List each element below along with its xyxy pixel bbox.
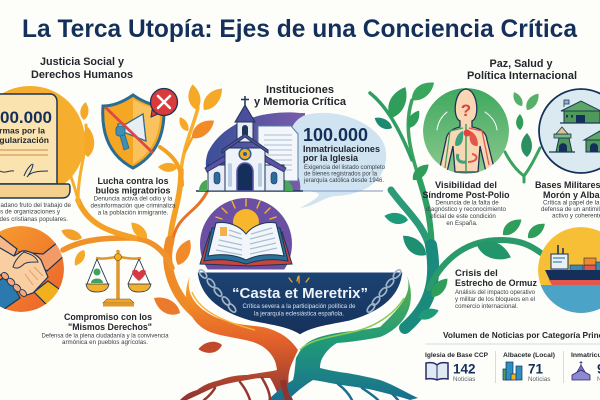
text block: Bases Militares <box>535 180 600 220</box>
stat: Albacete (Local) <box>503 352 555 383</box>
text block: 100.000 inmatriculaciones: jerarquía católica desde 1946. <box>303 177 384 184</box>
text block: Compromiso con los Mismos Derechos: armónica en pueblos agrícolas. <box>62 339 148 346</box>
tree: left orange branches <box>59 83 226 319</box>
icon: left chain <box>198 269 237 313</box>
text block: Visibilidad del Sindrome Post-Polio: en España. <box>446 220 478 227</box>
text block: Visibilidad del Sindrome Post-Polio: oficial de este condición <box>430 213 496 220</box>
tree trunk and roots <box>180 276 418 400</box>
icon: military bases circle <box>539 89 600 173</box>
text block: 100.000 inmatriculaciones: por la Iglesia <box>303 153 359 163</box>
heading: Justicia Social: Derechos Humanos <box>31 69 133 81</box>
icon: open book with sun <box>200 198 292 290</box>
icon: cargo ship circle <box>538 227 600 315</box>
icon: city buildings <box>503 362 522 380</box>
text block: Visibilidad del Sindrome Post-Polio <box>422 180 510 227</box>
text block: Visibilidad del Sindrome Post-Polio: Visibilidad del <box>435 180 497 191</box>
icon: paper list <box>258 126 298 181</box>
text block: Crisis del Estrecho de Ormuz <box>455 268 537 310</box>
icon: handshake circle <box>0 226 66 315</box>
stat: Albacete (Local): 71 <box>528 362 544 376</box>
stat: Albacete (Local): Noticias <box>528 376 550 383</box>
text block: Lucha contra los bulos: a la población inmigrante. <box>98 210 169 216</box>
text block: 100.000 inmatriculaciones: Exigencia del listado completo <box>304 164 386 171</box>
heading: Instituciones y Memoria Crítica <box>254 84 347 108</box>
text block: Visibilidad del Sindrome Post-Polio: Síndrome Post-Polio <box>422 190 510 201</box>
heading: Justicia Social: Justicia Social y <box>40 56 124 68</box>
icon: church <box>196 96 303 191</box>
text block: 100.000 inmatriculaciones: Inmatriculaciones <box>303 144 380 154</box>
heading: Paz, Salud y Politica Internacional <box>467 58 577 82</box>
stat: Albacete (Local): Albacete (Local) <box>503 352 555 359</box>
text block: Compromiso con los Mismos Derechos: Compromiso con los <box>64 312 152 323</box>
icon: red X badge <box>150 88 178 117</box>
icon: small church <box>572 361 590 380</box>
panel: inmatriculaciones bubble <box>196 96 386 208</box>
title: La Terca Utopía: Ejes de una Conciencia Crítica <box>22 15 578 43</box>
icon: right chain <box>366 269 402 313</box>
heading: Instituciones y Memoria Crítica: y Memoria Crítica <box>254 96 347 108</box>
tree: right green branches <box>370 77 548 328</box>
stat: Iglesia de Base CCP <box>425 352 488 383</box>
text block: Compromiso con los Mismos Derechos <box>42 312 169 346</box>
icon: post-polio body: ? <box>461 101 471 120</box>
panel: Casta et Meretrix banner: Crítica severa a la participación política de <box>242 304 356 310</box>
panel: Casta et Meretrix banner: la jerarquía eclesiástica española. <box>254 312 344 318</box>
text block: Lucha contra los bulos <box>91 176 176 216</box>
text block: 100.000 inmatriculaciones: 100.000 <box>303 125 368 145</box>
text block: Lucha contra los bulos: Denuncia activa del odio y la <box>94 196 173 202</box>
heading: Justicia Social <box>31 56 133 81</box>
heading: Instituciones y Memoria Crítica: Instituciones <box>266 84 334 96</box>
icon: shield with crossed megaphone <box>103 88 178 168</box>
stat: Iglesia de Base CCP: 142 <box>453 362 476 376</box>
icon: post-polio body <box>423 88 509 174</box>
text block: Crisis del Estrecho de Ormuz: y militar de los bloqueos en el <box>455 296 535 303</box>
text block: Crisis del Estrecho de Ormuz: Análisis del impacto operativo <box>455 289 536 296</box>
text block: Lucha contra los bulos: Lucha contra los <box>98 176 168 186</box>
text block: 100.000 inmatriculaciones <box>303 125 386 184</box>
stat: Iglesia de Base CCP: Noticias <box>453 376 475 383</box>
text block: Lucha contra los bulos: desinformación que criminaliza <box>91 202 176 210</box>
text block: Compromiso con los Mismos Derechos: "Mismos Derechos" <box>68 322 152 333</box>
text block: Compromiso con los Mismos Derechos: Defensa de la plena ciudadanía y la convivencia <box>42 332 169 340</box>
text block: Visibilidad del Sindrome Post-Polio: Denuncia de la falta de <box>435 200 499 206</box>
stat: Iglesia de Base CCP: Iglesia de Base CCP <box>425 352 488 359</box>
text block: Visibilidad del Sindrome Post-Polio: diagnóstico y reconocimiento <box>426 206 506 213</box>
panel: Casta et Meretrix banner <box>196 269 404 336</box>
text block: Crisis del Estrecho de Ormuz: Estrecho de Ormuz <box>455 278 537 289</box>
text block: Crisis del Estrecho de Ormuz: comercio internacional. <box>455 303 518 310</box>
text block: firmas description <box>0 202 72 223</box>
text block: Lucha contra los bulos: bulos migratorios <box>96 186 170 196</box>
panel: parchment with signatures <box>0 86 85 198</box>
text block: Crisis del Estrecho de Ormuz: Crisis del <box>455 268 498 279</box>
icon: book <box>426 363 448 380</box>
heading: Paz, Salud y Politica Internacional: Política Internacional <box>467 70 577 82</box>
text block: 100.000 inmatriculaciones: de bienes registrados por la <box>304 170 378 178</box>
stat: Inmatriculaciones <box>571 352 600 383</box>
panel: Casta et Meretrix banner: “Casta et Meretrix” <box>232 286 368 302</box>
icon: balance scales <box>86 250 151 306</box>
heading: Paz, Salud y Politica Internacional: Paz, Salud y <box>490 58 552 70</box>
